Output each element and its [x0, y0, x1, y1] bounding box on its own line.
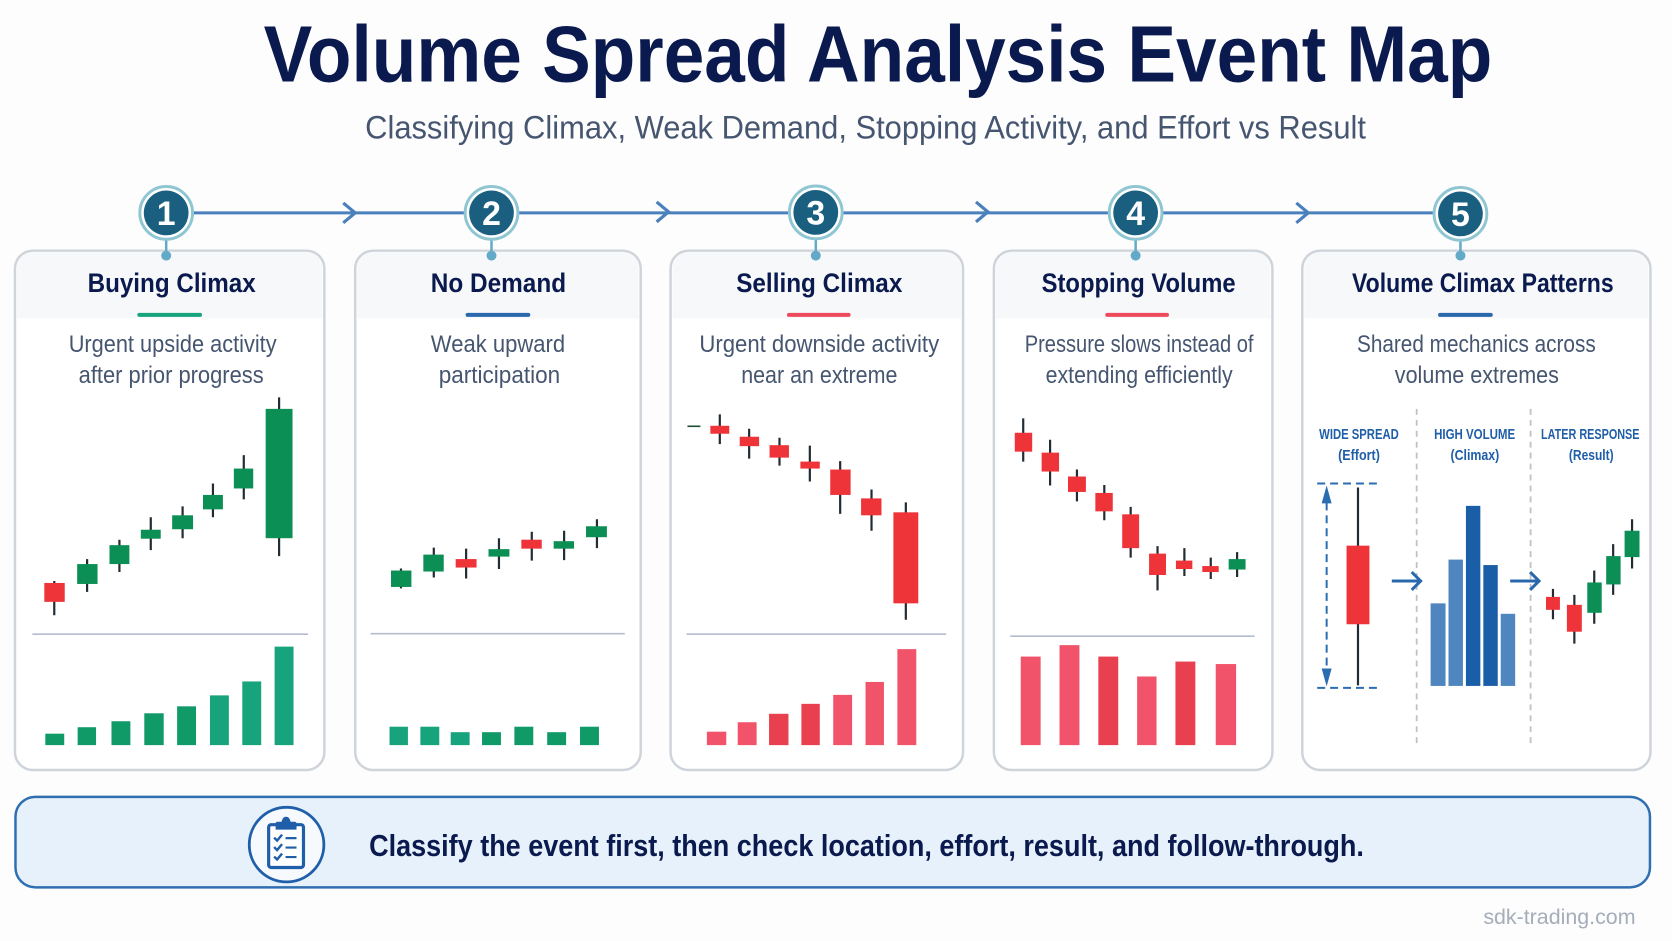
panel: selling climax	[671, 251, 963, 770]
description	[699, 331, 939, 389]
accent bar	[466, 313, 530, 317]
step marker 2: 2	[482, 195, 501, 233]
description: after prior progress	[79, 362, 264, 389]
step marker 5	[1434, 188, 1487, 261]
step marker 4	[1109, 187, 1162, 261]
title: Volume Spread Analysis Event Map	[264, 10, 1492, 99]
step marker 1: 1	[157, 195, 176, 233]
labels: later response	[1541, 426, 1640, 464]
description: Pressure slows instead of	[1025, 331, 1254, 358]
accent bar	[1105, 313, 1169, 317]
heading: Buying Climax	[88, 268, 256, 298]
step marker 3	[789, 186, 842, 261]
panel: buying climax	[15, 251, 324, 770]
description	[1357, 331, 1596, 389]
description: Urgent upside activity	[69, 331, 277, 358]
timeline connector with arrows	[189, 202, 1438, 223]
description: volume extremes	[1395, 362, 1559, 389]
callout text: Classify the event first, then check location, effort, result, and follow-through.	[369, 828, 1364, 863]
step marker 3: 3	[806, 194, 825, 232]
description: Weak upward	[431, 331, 565, 358]
labels: high volume	[1434, 426, 1515, 464]
labels: later response: (Result)	[1569, 447, 1614, 464]
description	[69, 331, 277, 389]
heading: Selling Climax	[736, 268, 902, 298]
candlestick chart	[1015, 418, 1246, 590]
description	[431, 331, 565, 389]
labels: high volume: HIGH VOLUME	[1434, 426, 1515, 443]
description: Shared mechanics across	[1357, 331, 1596, 358]
panel: no demand	[355, 251, 641, 770]
high volume bars	[1431, 506, 1515, 686]
later response candles	[1546, 519, 1640, 644]
accent bar	[137, 313, 202, 317]
heading: Volume Climax Patterns	[1352, 268, 1614, 298]
step marker 5: 5	[1451, 196, 1470, 234]
labels: wide spread: (Effort)	[1338, 447, 1380, 464]
wide spread candle with range arrow	[1317, 483, 1382, 688]
description: Urgent downside activity	[699, 331, 939, 358]
description: near an extreme	[741, 362, 897, 389]
volume bars	[707, 649, 916, 745]
description	[1025, 331, 1254, 389]
description: extending efficiently	[1046, 362, 1233, 389]
step marker 1	[140, 187, 193, 261]
heading: Stopping Volume	[1042, 268, 1236, 298]
candlestick chart	[391, 519, 607, 588]
labels: wide spread	[1319, 426, 1399, 464]
callout banner	[15, 797, 1650, 887]
accent bar	[1438, 313, 1493, 317]
arrow: effort to climax	[1392, 572, 1421, 590]
description: participation	[439, 362, 560, 389]
volume bars	[45, 647, 294, 745]
accent bar	[787, 313, 851, 317]
panel: volume climax patterns	[1302, 251, 1650, 770]
step marker 2	[465, 187, 518, 261]
subtitle: Classifying Climax, Weak Demand, Stopping Activity, and Effort vs Result	[365, 108, 1366, 145]
watermark: sdk-trading.com	[1483, 906, 1636, 929]
icon: clipboard checklist	[249, 807, 324, 882]
arrow: climax to response	[1510, 572, 1539, 590]
step marker 4: 4	[1126, 195, 1145, 233]
candlestick chart	[44, 397, 293, 615]
labels: wide spread: WIDE SPREAD	[1319, 426, 1399, 443]
labels: high volume: (Climax)	[1451, 447, 1499, 464]
candlestick chart	[687, 414, 918, 620]
panel: stopping volume	[994, 251, 1272, 770]
heading: No Demand	[431, 268, 566, 298]
volume bars	[1021, 645, 1236, 745]
volume bars	[390, 727, 599, 745]
